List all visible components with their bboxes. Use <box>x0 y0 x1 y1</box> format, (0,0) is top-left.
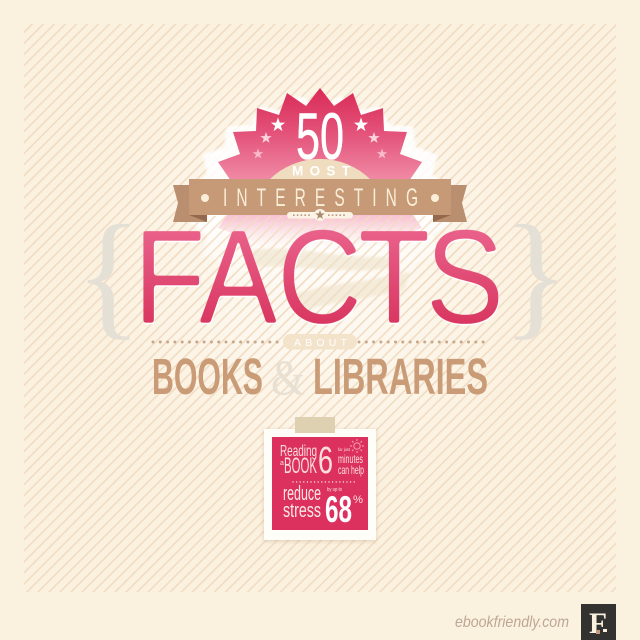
ribbon bullet left <box>201 194 209 202</box>
by up to: by up to <box>327 487 342 493</box>
ABOUT pill <box>283 334 357 350</box>
white burst backing <box>190 96 450 314</box>
icon: sun <box>350 439 364 453</box>
right brace: } <box>502 197 569 352</box>
dotted divider <box>293 481 357 483</box>
logo <box>581 604 616 640</box>
tape <box>295 417 335 433</box>
word FACTS: FACTS <box>134 204 505 353</box>
number 50: 50 <box>296 99 344 173</box>
stress: stress <box>283 500 321 522</box>
word BOOKS: BOOKS <box>152 348 263 405</box>
dotted rule left <box>153 340 281 344</box>
word MOST: MOST <box>292 164 351 178</box>
central glow <box>60 30 580 490</box>
68: 68 <box>325 489 352 530</box>
dotted rule right <box>359 340 487 344</box>
ampersand: & <box>271 349 305 405</box>
can help: can help <box>338 463 364 477</box>
pale swash behind FACTS <box>245 248 410 312</box>
percent: % <box>353 494 363 506</box>
Reading: Reading <box>280 443 317 460</box>
for just: for just <box>338 447 351 452</box>
card red panel <box>272 437 368 530</box>
fact card <box>264 417 376 540</box>
ribbon bullet right <box>431 194 439 202</box>
small ribbon pill with star <box>287 209 353 221</box>
a: a <box>280 460 284 467</box>
sun dome behind MOST <box>269 159 371 180</box>
card white mat <box>264 429 376 540</box>
ribbon main band <box>189 179 451 215</box>
stars left and right <box>253 118 387 158</box>
big 6: 6 <box>318 440 333 482</box>
word FACTS: FACTS <box>133 202 504 352</box>
re-striping over the faded lower badge <box>170 216 470 306</box>
BOOK: BOOK <box>284 453 317 478</box>
word INTERESTING: INTERESTING <box>223 184 418 212</box>
logo: F <box>589 607 607 640</box>
website credit: ebookfriendly.com <box>455 614 569 631</box>
red burst badge <box>213 88 427 302</box>
ribbon tails <box>173 185 467 222</box>
word ABOUT: ABOUT <box>294 337 348 349</box>
word LIBRARIES: LIBRARIES <box>313 348 488 405</box>
minutes: minutes <box>338 452 363 466</box>
left brace: { <box>75 197 142 352</box>
reduce: reduce <box>283 483 321 505</box>
